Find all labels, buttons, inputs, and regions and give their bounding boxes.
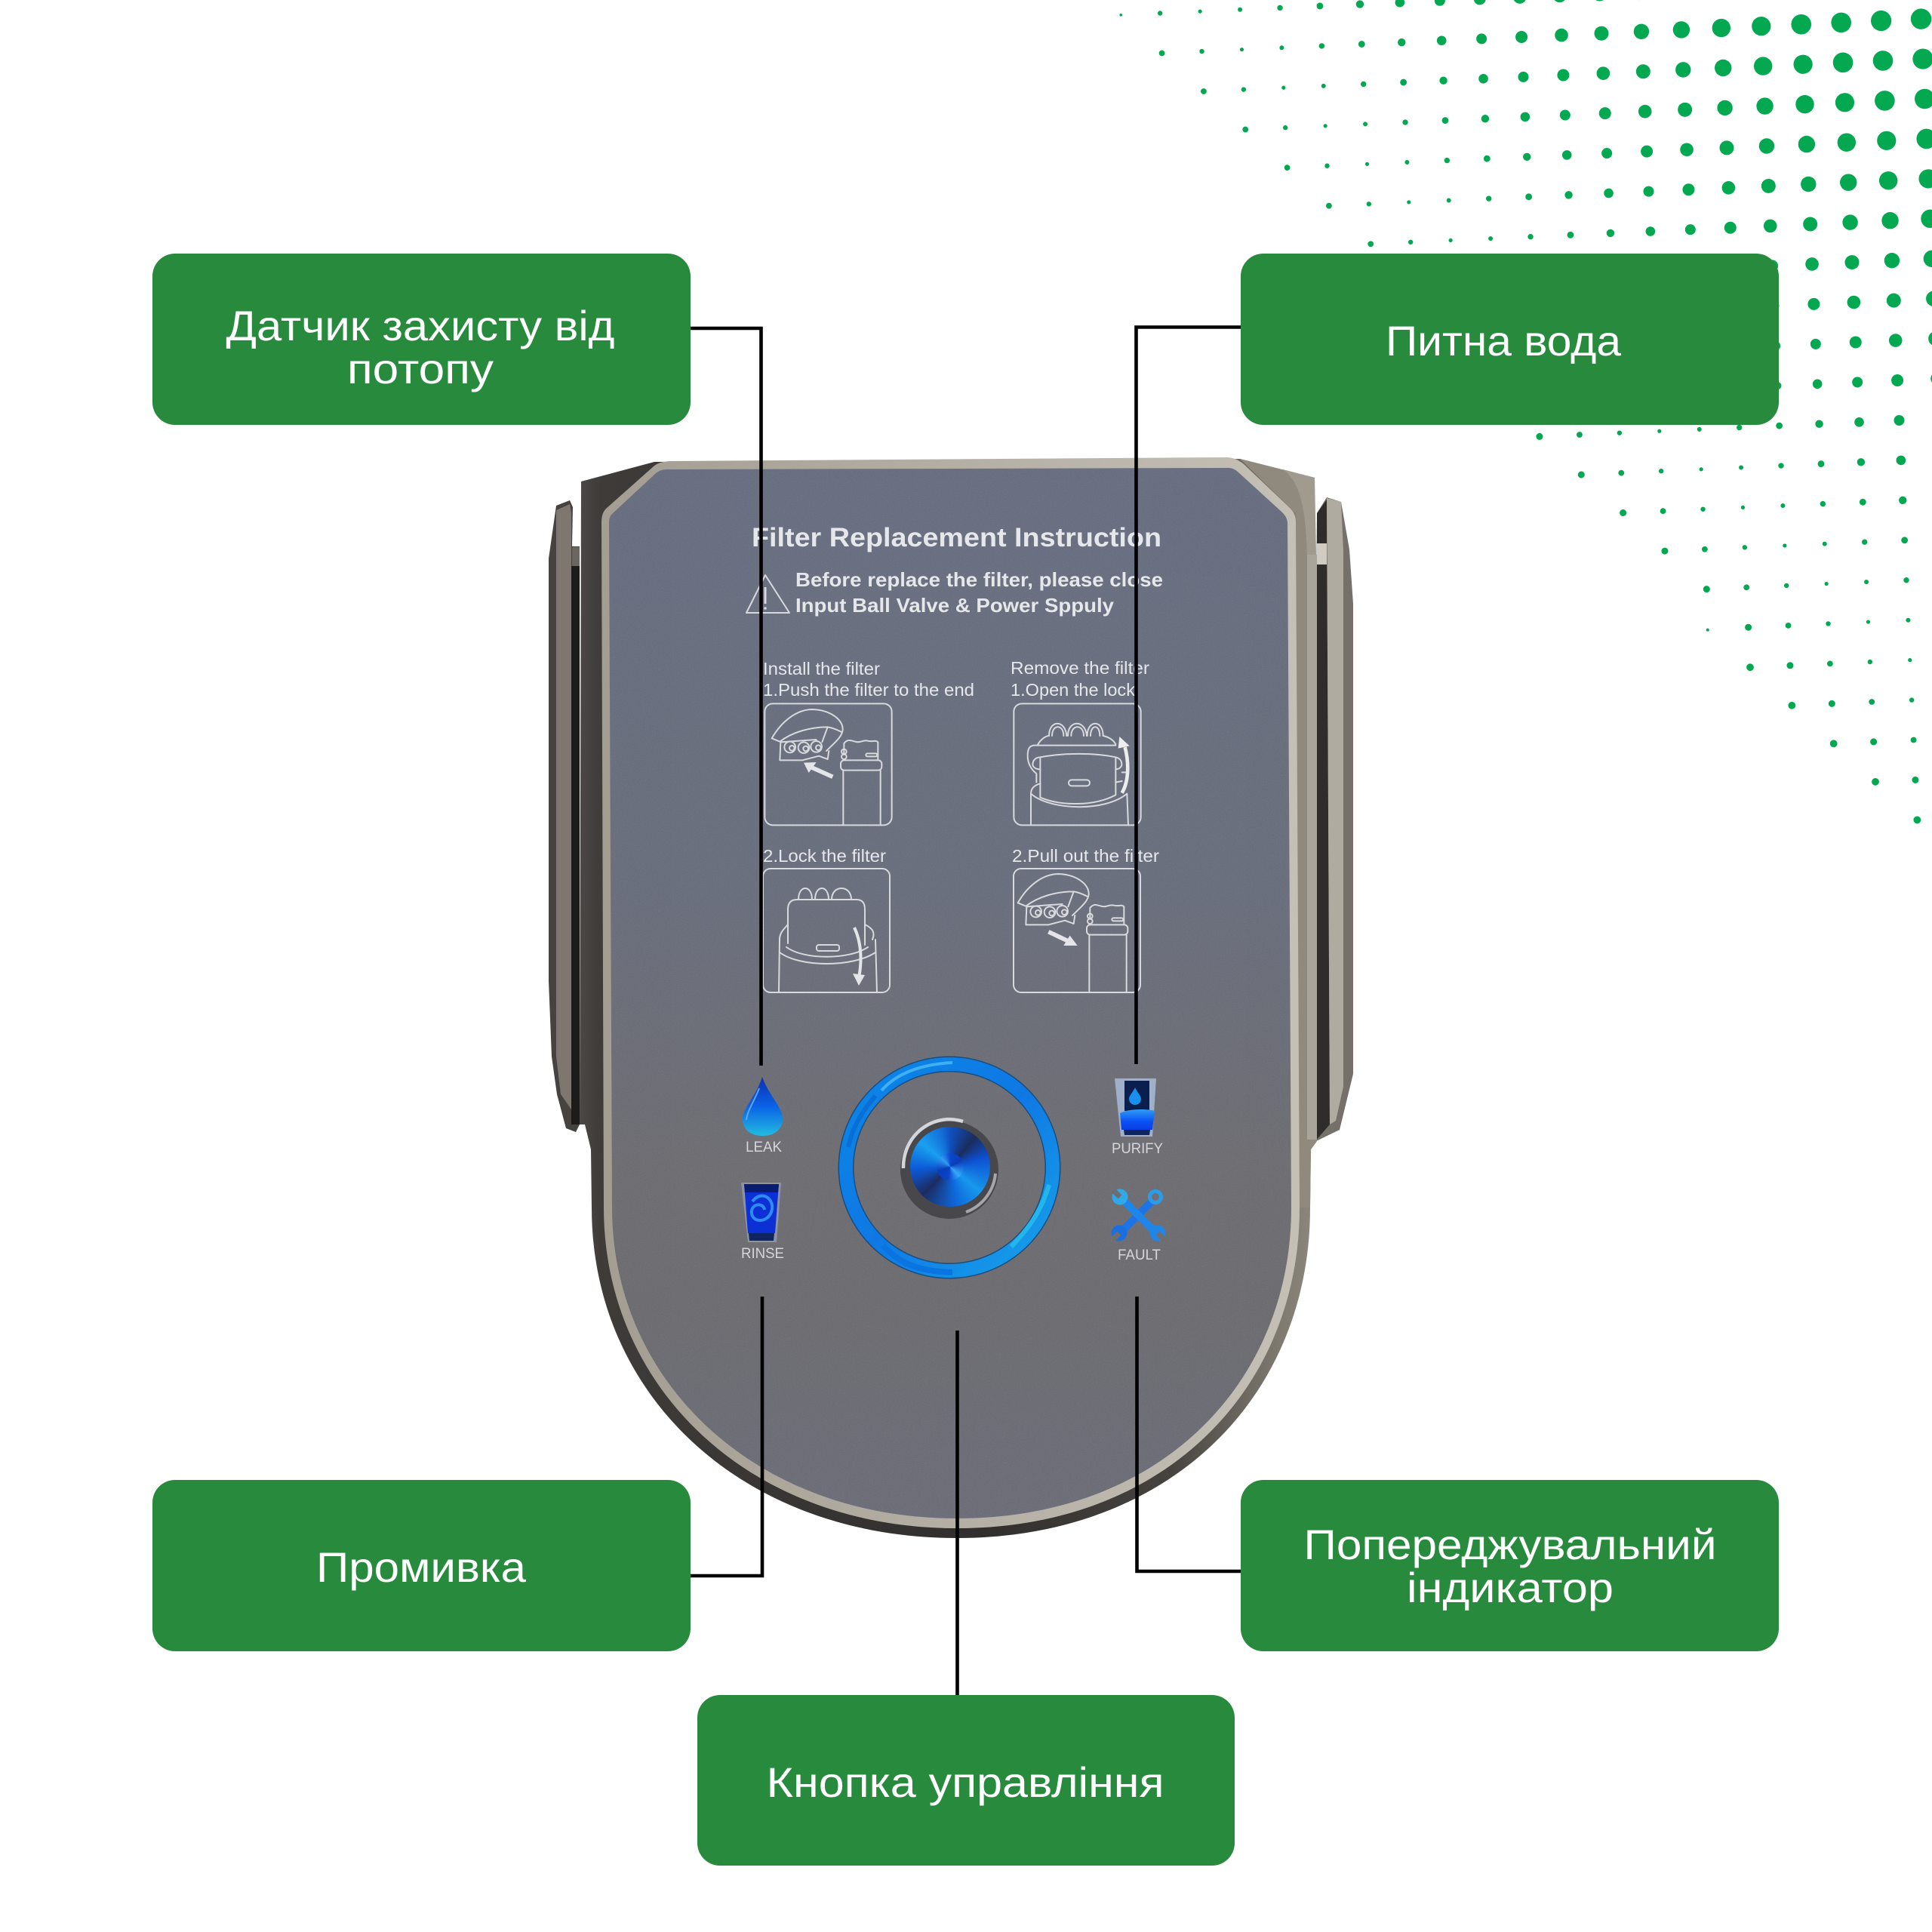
grey plate	[609, 468, 1291, 1518]
callout: rinse: Промивка	[316, 1543, 527, 1591]
device body	[580, 459, 1317, 1538]
label: fault: FAULT	[1118, 1247, 1161, 1263]
icon: purify glass	[1115, 1078, 1156, 1137]
remove step 1: 1.Open the lock	[1011, 680, 1136, 700]
label: purify: PURIFY	[1112, 1141, 1163, 1157]
install step 1	[763, 659, 974, 825]
connector: fault	[1137, 1297, 1241, 1571]
callout: flood sensor: Датчик захисту від	[226, 302, 614, 349]
icon: leak drop	[743, 1077, 783, 1136]
remove step 1: Remove the filter	[1011, 658, 1149, 678]
connector: rinse	[691, 1297, 762, 1576]
callout: drinking water	[1241, 254, 1779, 425]
callout: flood sensor: потопу	[347, 345, 494, 392]
blue ring	[846, 1063, 1053, 1272]
callout: warning indicator: індикатор	[1407, 1564, 1614, 1611]
callout: control button	[697, 1695, 1235, 1866]
device: control panel	[549, 457, 1353, 1538]
callout: flood sensor	[152, 254, 691, 425]
callout: rinse	[152, 1480, 691, 1651]
connector: purify	[1137, 328, 1241, 1064]
icon: rinse glass	[741, 1183, 781, 1242]
callout: control button: Кнопка управління	[767, 1758, 1164, 1806]
lock step 2: 2.Lock the filter	[763, 846, 886, 866]
instruction title: Filter Replacement Instruction	[752, 523, 1161, 552]
warning text: Before replace the filter, please close	[795, 568, 1163, 591]
left side ear	[549, 500, 580, 1132]
callout: drinking water: Питна вода	[1386, 317, 1622, 365]
control button	[900, 1119, 998, 1219]
callout: warning indicator: Попереджувальний	[1304, 1521, 1716, 1568]
callout: warning indicator	[1241, 1480, 1779, 1651]
pull out step 2: 2.Pull out the filter	[1012, 846, 1159, 866]
warning text: Input Ball Valve & Power Sppuly	[795, 594, 1115, 617]
label: rinse: RINSE	[741, 1246, 784, 1262]
lock step 2	[763, 846, 890, 992]
pull out step 2	[1012, 846, 1159, 992]
install step 1: Install the filter	[763, 659, 880, 678]
label: leak: LEAK	[746, 1140, 782, 1155]
beige rim	[601, 457, 1300, 1528]
connector: leak	[691, 328, 761, 1066]
right side ear	[1315, 497, 1353, 1142]
remove step 1	[1011, 658, 1149, 825]
warning text	[795, 568, 1163, 617]
right body shell	[1240, 459, 1317, 1208]
connector: control button	[955, 1331, 959, 1696]
halftone dot pattern	[1119, 0, 1932, 855]
warning icon	[746, 575, 789, 613]
install step 1: 1.Push the filter to the end	[763, 680, 974, 700]
icon: fault wrenches	[1111, 1189, 1165, 1241]
